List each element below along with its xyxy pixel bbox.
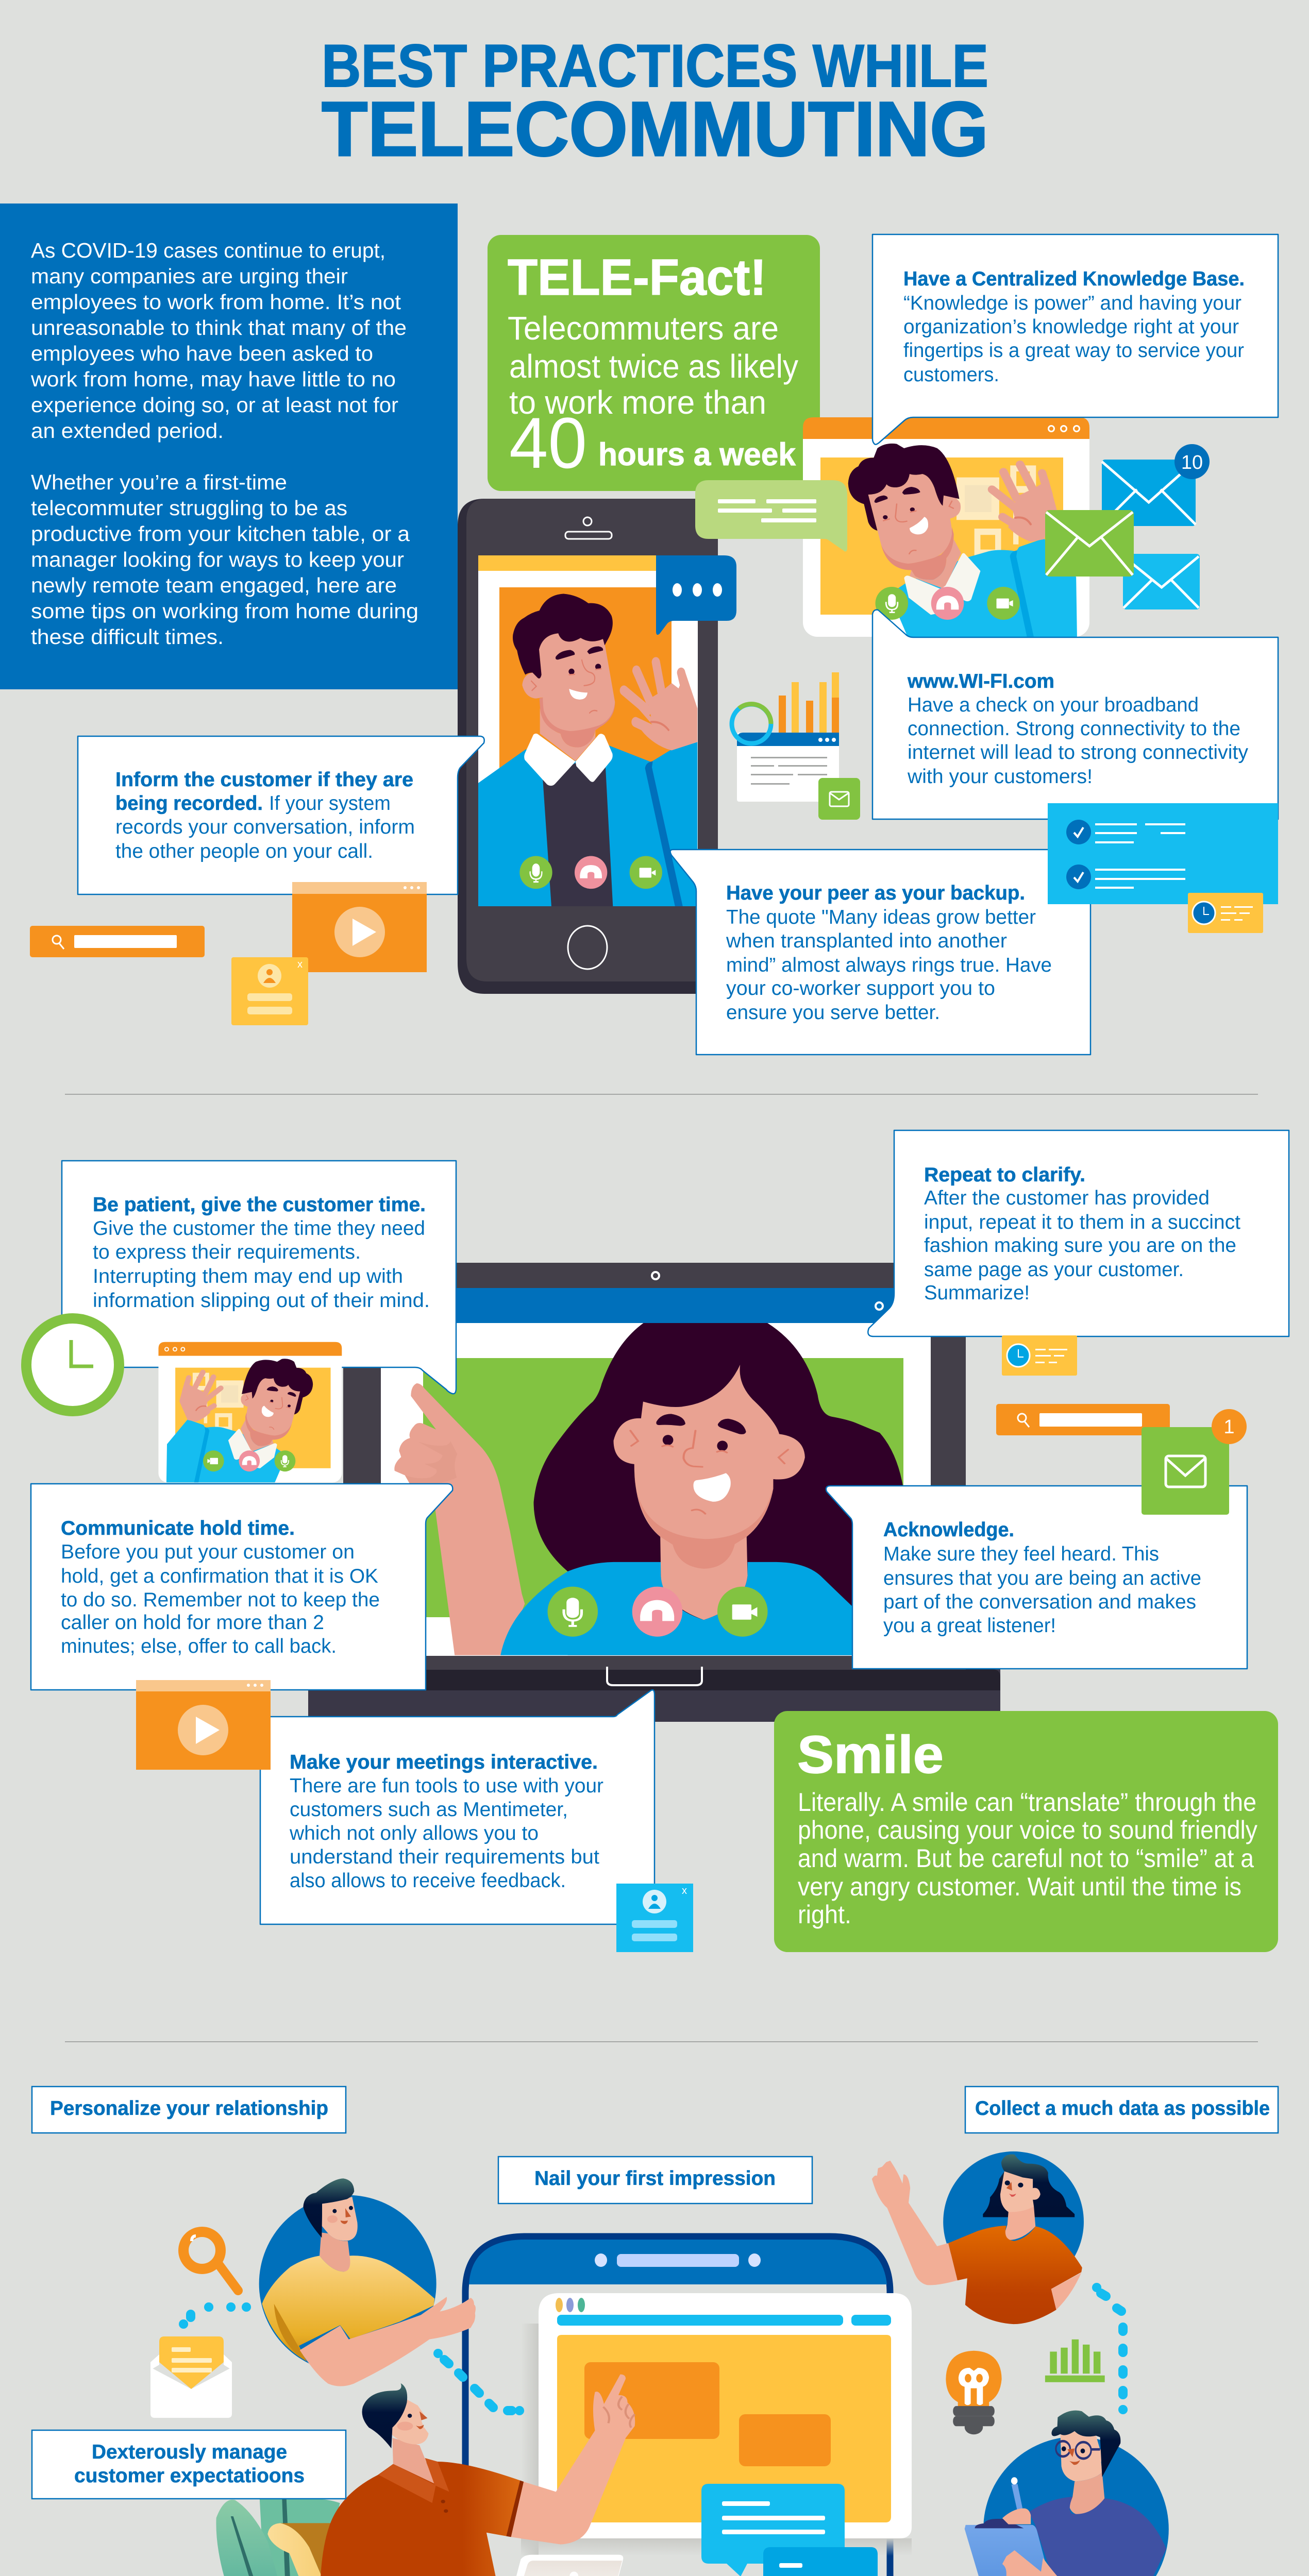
icon: mail with badge	[1142, 1409, 1247, 1515]
panel: TELE-Fact	[488, 235, 820, 491]
panel: introduction: unreasonable to think that many of the	[31, 316, 407, 340]
label: collect data	[965, 2087, 1278, 2133]
callout: customer being recorded: records your conversation, inform	[115, 816, 415, 838]
callout: acknowledge	[826, 1486, 1247, 1669]
callout: centralized knowledge base: organization’s knowledge right at your	[903, 316, 1239, 338]
panel: introduction: productive from your kitchen table, or a	[31, 522, 410, 546]
icon: video player	[136, 1680, 271, 1770]
callout: communicate hold time: Communicate hold time.	[61, 1517, 295, 1539]
icon: envelopes with badge	[1045, 444, 1210, 609]
icon: clock	[26, 1318, 119, 1411]
callout: repeat to clarify: fashion making sure you are on the	[924, 1234, 1236, 1257]
callout: customer being recorded: Inform the customer if they are	[115, 769, 413, 791]
callout: peer backup: mind” almost always rings true. Have	[726, 954, 1052, 976]
panel: introduction: experience doing so, or at least not for	[31, 393, 398, 417]
panel: TELE-Fact: 40	[509, 402, 587, 483]
illustration: tablet with man waving	[803, 417, 1089, 637]
callout: acknowledge: part of the conversation and makes	[883, 1591, 1196, 1613]
callout: peer backup: ensure you serve better.	[726, 1002, 940, 1024]
callout: be patient: Give the customer the time they need	[93, 1217, 425, 1240]
label: personalize	[32, 2087, 346, 2133]
icon: clock card	[1002, 1335, 1077, 1376]
callout: be patient: information slipping out of their mind.	[93, 1290, 430, 1312]
panel: introduction	[0, 204, 458, 689]
icon: connector dots	[183, 2287, 1123, 2576]
callout: make meetings interactive: There are fun tools to use with your	[290, 1775, 603, 1797]
callout: acknowledge: you a great listener!	[883, 1615, 1056, 1637]
person: woman in orange shirt	[872, 2151, 1084, 2324]
label: personalize: Personalize your relationship	[50, 2097, 328, 2120]
panel: smile	[774, 1711, 1278, 1952]
callout: wi-fi: Have a check on your broadband	[908, 694, 1199, 716]
person: man in yellow shirt	[259, 2178, 476, 2386]
callout: centralized knowledge base: Have a Centralized Knowledge Base.	[903, 268, 1245, 290]
callout: centralized knowledge base: fingertips is a great way to service your	[903, 340, 1244, 362]
callout: make meetings interactive: customers such as Mentimeter,	[290, 1799, 568, 1821]
icon: analytics card	[732, 672, 860, 820]
panel: introduction: many companies are urging their	[31, 264, 348, 288]
callout: peer backup	[670, 850, 1090, 1055]
panel: TELE-Fact: Telecommuters are	[508, 310, 779, 347]
panel: TELE-Fact: hours a week	[598, 437, 796, 472]
callout: communicate hold time: Before you put your customer on	[61, 1541, 355, 1563]
callout: wi-fi	[872, 610, 1278, 819]
panel: introduction: employees to work from home. It’s not	[31, 290, 401, 314]
callout: peer backup: your co-worker support you to	[726, 977, 995, 999]
icon: light green chat bubble	[695, 480, 847, 552]
icon: checklist	[1048, 803, 1278, 904]
icon: light bulb	[946, 2351, 1002, 2434]
callout: wi-fi: with your customers!	[907, 766, 1093, 788]
person: man with clipboard	[965, 2411, 1169, 2576]
illustration: plant in pot	[216, 2499, 340, 2576]
callout: wi-fi: internet will lead to strong connectivity	[908, 741, 1248, 764]
callout: make meetings interactive: understand their requirements but	[290, 1846, 599, 1868]
callout: repeat to clarify: After the customer has provided	[924, 1187, 1210, 1209]
panel: smile: Smile	[797, 1725, 944, 1784]
panel: TELE-Fact: TELE-Fact!	[508, 249, 766, 306]
panel: smile: phone, causing your voice to sound friendly	[798, 1816, 1257, 1844]
callout: communicate hold time: hold, get a confirmation that it is OK	[61, 1565, 378, 1587]
callout: customer being recorded: being recorded.	[115, 792, 263, 815]
callout: communicate hold time: minutes; else, offer to call back.	[61, 1635, 337, 1657]
icon: search bar	[996, 1404, 1170, 1435]
callout: repeat to clarify: Repeat to clarify.	[924, 1164, 1085, 1186]
illustration: phone with man waving	[458, 499, 718, 994]
illustration: small tablet with man	[158, 1342, 342, 1483]
panel: TELE-Fact: almost twice as likely	[509, 348, 798, 385]
callout: repeat to clarify: input, repeat it to them in a succinct	[924, 1211, 1240, 1233]
callout: peer backup: The quote "Many ideas grow better	[726, 906, 1036, 928]
label: expectations: customer expectatioons	[74, 2465, 305, 2487]
icon: bar chart	[1045, 2340, 1105, 2382]
callout: repeat to clarify: Summarize!	[924, 1282, 1030, 1304]
callout: acknowledge: ensures that you are being an active	[883, 1567, 1201, 1589]
callout: communicate hold time	[31, 1484, 452, 1690]
person: seated man with laptop	[320, 2375, 767, 2576]
callout: peer backup: when transplanted into another	[726, 930, 1007, 952]
panel: introduction: work from home, may have little to no	[30, 367, 396, 391]
callout: communicate hold time: caller on hold for more than 2	[61, 1612, 324, 1634]
callout: wi-fi: www.WI-FI.com	[907, 670, 1054, 692]
panel: introduction: these difficult times.	[31, 625, 224, 649]
callout: repeat to clarify: same page as your customer.	[924, 1259, 1184, 1281]
icon: contact card cyan: x	[682, 1885, 687, 1896]
callout: repeat to clarify	[868, 1130, 1289, 1336]
callout: make meetings interactive: also allows to receive feedback.	[290, 1870, 566, 1892]
label: collect data: Collect a much data as possible	[975, 2097, 1270, 2120]
panel: introduction: newly remote team engaged, here are	[31, 573, 397, 597]
callout: customer being recorded	[78, 736, 484, 894]
callout: centralized knowledge base	[872, 234, 1278, 445]
illustration: laptop with woman	[308, 1263, 1000, 1722]
callout: be patient: to express their requirements.	[93, 1241, 361, 1263]
callout: communicate hold time: to do so. Remember not to keep the	[61, 1589, 380, 1611]
callout: centralized knowledge base: “Knowledge is power” and having your	[903, 292, 1241, 314]
icon: search bar	[30, 926, 205, 957]
illustration: chair	[267, 2523, 637, 2576]
panel: smile: right.	[798, 1900, 851, 1929]
icon: envelope with letter	[150, 2336, 232, 2418]
callout: acknowledge: Acknowledge.	[883, 1519, 1014, 1541]
label: first impression	[498, 2157, 812, 2204]
callout: be patient: Be patient, give the customer time.	[93, 1194, 426, 1216]
callout: peer backup: Have your peer as your backup.	[726, 882, 1025, 904]
icon: chat bubbles	[680, 2484, 878, 2576]
title: BEST PRACTICES WHILE	[322, 32, 988, 99]
icon: mail with badge: 1	[1223, 1416, 1235, 1438]
callout: make meetings interactive: which not only allows you to	[289, 1822, 539, 1844]
callout: centralized knowledge base: customers.	[903, 364, 999, 386]
panel: introduction: employees who have been asked to	[31, 342, 373, 365]
icon: blue chat bubble	[656, 555, 736, 635]
panel: smile: Literally. A smile can “translate” through the	[798, 1788, 1256, 1817]
panel: TELE-Fact: to work more than	[509, 384, 766, 421]
label: first impression: Nail your first impression	[534, 2167, 776, 2190]
icon: envelopes with badge: 10	[1181, 452, 1203, 473]
callout: be patient	[62, 1161, 456, 1394]
illustration: large phone	[465, 2236, 912, 2576]
icon: contact card cyan	[616, 1884, 693, 1952]
label: expectations: Dexterously manage	[92, 2441, 287, 2463]
icon: contact card yellow: x	[297, 959, 303, 970]
callout: wi-fi: connection. Strong connectivity to the	[908, 718, 1240, 740]
panel: introduction: Whether you’re a first-time	[31, 470, 287, 494]
callout: be patient: Interrupting them may end up with	[93, 1265, 403, 1287]
callout: customer being recorded: If your system	[269, 792, 391, 815]
panel: introduction: an extended period.	[31, 419, 224, 443]
callout: make meetings interactive	[260, 1690, 654, 1924]
callout: acknowledge: Make sure they feel heard. This	[883, 1543, 1159, 1565]
icon: magnifying glass	[183, 2232, 238, 2291]
label: expectations	[32, 2430, 346, 2499]
panel: introduction: telecommuter struggling to be as	[31, 496, 347, 520]
panel: introduction: As COVID-19 cases continue to erupt,	[31, 239, 385, 262]
icon: video player	[292, 882, 427, 972]
title	[322, 32, 988, 172]
callout: customer being recorded: the other people on your call.	[115, 840, 373, 862]
icon: clock card	[1188, 893, 1263, 933]
panel: introduction: manager looking for ways to keep your	[31, 548, 404, 571]
panel: smile: and warm. But be careful not to “smile” at a	[798, 1844, 1254, 1873]
callout: make meetings interactive: Make your meetings interactive.	[290, 1751, 598, 1773]
title: TELECOMMUTING	[322, 86, 988, 172]
icon: contact card yellow	[231, 957, 308, 1025]
panel: introduction: some tips on working from home during	[31, 599, 418, 623]
panel: smile: very angry customer. Wait until the time is	[798, 1872, 1241, 1901]
